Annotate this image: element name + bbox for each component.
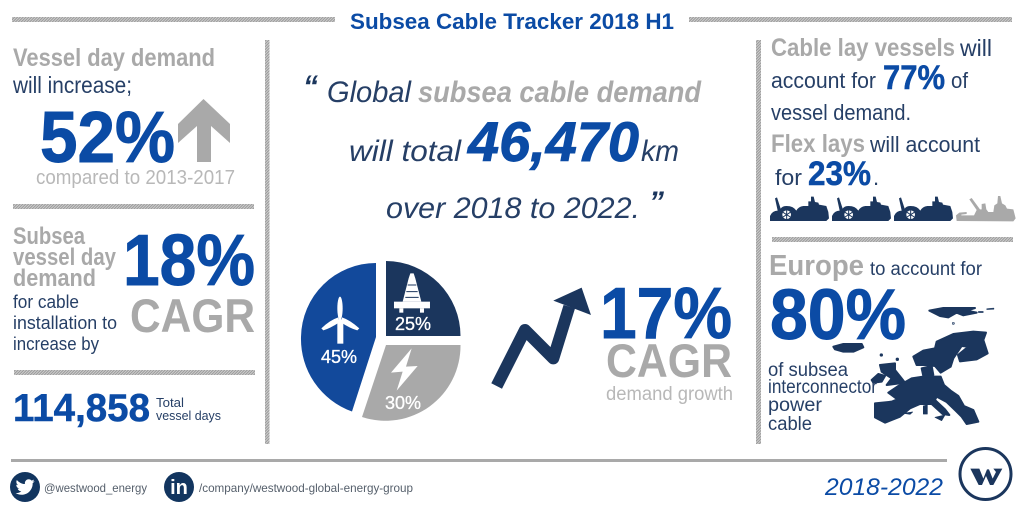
text: cable lay vessels: 77% bbox=[883, 59, 945, 97]
icon: flex lay vessel bbox=[956, 196, 1016, 221]
closing quote mark: ” bbox=[649, 186, 664, 219]
stat: 114,858: 114,858 bbox=[13, 387, 150, 430]
text: total vessel days: Total bbox=[156, 395, 184, 410]
icon: oil rig bbox=[394, 273, 430, 313]
opening quote mark: “ bbox=[303, 70, 318, 103]
text: flex lays: 23% bbox=[808, 155, 871, 193]
text: linkedin path: /company/westwood-global-energy-group bbox=[199, 481, 413, 495]
icon: twitter bbox=[10, 472, 40, 502]
stat: 18%: 18% bbox=[123, 221, 255, 301]
logo: Westwood bbox=[960, 448, 1011, 500]
text: total vessel days: vessel days bbox=[156, 408, 221, 423]
heading: Europe: to account for bbox=[870, 259, 983, 280]
quote line 2 bbox=[349, 110, 679, 173]
map: Europe bbox=[833, 308, 994, 424]
text: date range: 2018-2022 bbox=[824, 474, 943, 501]
quote line 1: Global bbox=[327, 76, 412, 109]
icon: cable lay vessel 2 bbox=[832, 197, 891, 221]
slice: wind 45% bbox=[301, 263, 376, 412]
text: twitter handle: @westwood_energy bbox=[44, 481, 147, 495]
heading: vessel day demand: Vessel day demand bbox=[13, 44, 215, 72]
text: of subsea interconnector power cable bbox=[768, 360, 878, 435]
slice: oil and gas 25% bbox=[386, 261, 460, 336]
text: of subsea interconnector power cable: power bbox=[768, 395, 823, 416]
text: flex lays: for bbox=[775, 165, 802, 190]
stat: 52%: 52% bbox=[40, 98, 175, 178]
icon: up arrow bbox=[178, 99, 230, 162]
slice: power 30%: 30% bbox=[385, 393, 421, 413]
heading: subsea vessel day demand bbox=[13, 223, 117, 292]
slice: oil and gas 25%: 25% bbox=[395, 314, 431, 334]
text: for cable installation bbox=[13, 292, 117, 354]
stat: 80%: 80% bbox=[770, 276, 906, 355]
text: cable lay vessels: Cable lay vessels bbox=[771, 34, 955, 62]
icon: linkedin: in bbox=[170, 477, 188, 499]
icon: wind turbine bbox=[321, 297, 359, 344]
heading: Europe: Europe bbox=[769, 250, 864, 282]
text: cable lay vessels: vessel demand. bbox=[771, 100, 911, 125]
text: flex lays: . bbox=[873, 165, 879, 190]
text: cable lay vessels bbox=[771, 34, 992, 125]
icon: cable lay vessel 1 bbox=[770, 197, 829, 221]
panel: demand growth bbox=[497, 274, 733, 405]
heading: subsea vessel day demand: demand bbox=[13, 265, 96, 292]
text: of subsea interconnector power cable: of subsea bbox=[768, 360, 848, 381]
icon: cable lay vessel 3 bbox=[894, 197, 953, 221]
slice: power 30% bbox=[362, 345, 461, 421]
text: of subsea interconnector power cable: interconnector bbox=[768, 377, 878, 398]
text: total vessel days bbox=[156, 395, 221, 423]
text: cable lay vessels: account for bbox=[771, 68, 876, 93]
heading: subsea vessel day demand: Subsea bbox=[13, 223, 86, 250]
text: cable lay vessels: will bbox=[959, 35, 992, 61]
panel: Europe bbox=[768, 250, 994, 435]
icon: linkedin bbox=[164, 472, 194, 502]
text: flex lays: Flex lays bbox=[771, 130, 865, 158]
text: flex lays bbox=[771, 130, 980, 193]
slice: wind 45%: 45% bbox=[321, 347, 357, 367]
pie chart bbox=[301, 261, 461, 421]
text: for cable installation: installation to bbox=[13, 313, 117, 333]
text: cable lay vessels: of bbox=[951, 68, 969, 93]
icon: rising trend arrow bbox=[497, 288, 591, 386]
text: of subsea interconnector power cable: cable bbox=[768, 414, 812, 435]
icon: lightning bolt bbox=[391, 348, 418, 391]
text: compared to 2013-2017: compared to 2013-2017 bbox=[36, 167, 235, 189]
panel: vessel split bbox=[770, 34, 1016, 221]
quote line 2: will total bbox=[349, 135, 462, 168]
text: for cable installation: increase by bbox=[13, 334, 99, 354]
text: for cable installation: for cable bbox=[13, 292, 79, 312]
panel: headline quote bbox=[303, 70, 702, 225]
stat label: CAGR: CAGR bbox=[606, 334, 732, 387]
heading: Europe bbox=[769, 250, 983, 282]
footer bbox=[10, 448, 1011, 502]
heading: subsea vessel day demand: vessel day bbox=[13, 244, 117, 271]
text: will increase: will increase; bbox=[12, 72, 132, 98]
panel: vessel day demand bbox=[12, 44, 235, 189]
text: demand growth: demand growth bbox=[606, 384, 733, 405]
quote line 1: subsea cable demand bbox=[418, 76, 702, 109]
quote line 2: km bbox=[641, 135, 679, 168]
title: Subsea Cable Tracker 2018 H1 bbox=[350, 9, 674, 34]
quote line 3: over 2018 to 2022. bbox=[386, 192, 640, 225]
text: flex lays: will account bbox=[869, 132, 980, 157]
panel: total vessel days bbox=[13, 387, 221, 430]
stat label: CAGR: CAGR bbox=[130, 289, 255, 342]
quote line 2: 46,470 bbox=[467, 110, 639, 173]
panel: cable installation CAGR bbox=[13, 221, 255, 354]
stat: 17%: 17% bbox=[600, 274, 732, 354]
